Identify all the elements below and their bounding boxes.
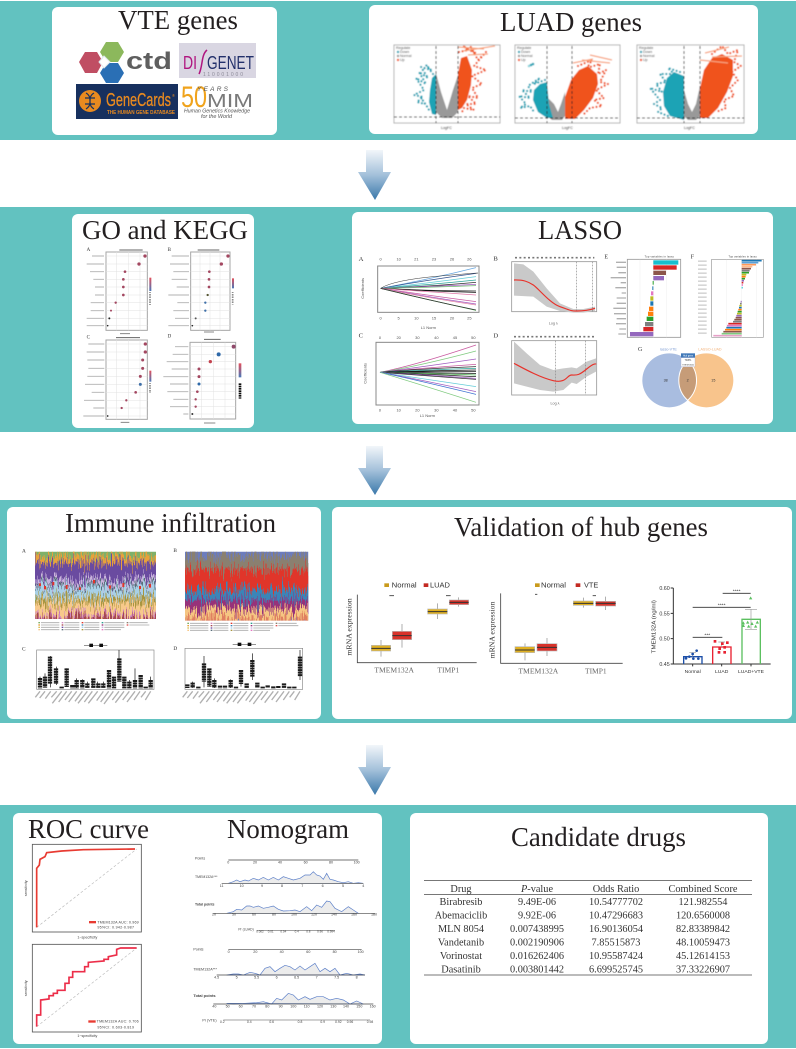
chart: volcano plot 1: Normal	[400, 54, 412, 58]
chart: enrichment dot plots A-D: C	[87, 335, 91, 340]
chart: volcano plot 3: Regulate	[639, 46, 653, 50]
table: drug candidates: 16.90136054	[589, 924, 643, 935]
chart: box plots C: C	[22, 647, 26, 653]
table: drug candidates: Birabresib	[440, 897, 482, 908]
chart: nomogram LUAD: TMEM132A***	[195, 875, 218, 879]
chart: nomogram LUAD: 0.04	[280, 929, 287, 933]
legend B	[187, 623, 298, 631]
chart: Venn diagram G: G	[638, 347, 643, 353]
chart: nomogram VTE: 160	[370, 1004, 376, 1008]
chart: nomogram LUAD: Points	[195, 856, 205, 860]
chart: ROC curve LUAD: TMEM132A AUC: 0.969	[97, 920, 139, 924]
chart: volcano plot 1: Regulate	[396, 46, 410, 50]
chart: nomogram LUAD: Pr (LUAD)	[238, 928, 254, 932]
chart: LASSO coefficients C: 0	[379, 335, 382, 340]
chart: nomogram LUAD: 9	[261, 884, 263, 888]
arrow: step 1 to step 2	[358, 150, 391, 200]
chart: bar chart TMEM132A ng/ml: ****	[733, 588, 741, 594]
table: drug candidates: 0.002190906	[510, 938, 564, 948]
chart: nomogram LUAD: 0.4	[295, 929, 299, 933]
chart: LASSO coefficients C: 10	[396, 408, 402, 413]
logo: OMIM 50 years: Human Genetics Knowledge	[184, 108, 250, 114]
table: drug candidates: 10.95587424	[589, 951, 643, 962]
chart: nomogram VTE: 80	[333, 950, 337, 954]
chart: nomogram VTE: 0.2	[220, 1020, 225, 1024]
chart: nomogram VTE: 8	[356, 975, 358, 979]
chart: Venn diagram G: LASSO-LUAD	[698, 347, 722, 351]
logo: OMIM 50 years: MIM	[207, 91, 253, 111]
chart: bar chart TMEM132A ng/ml: ***	[704, 632, 710, 638]
chart: LASSO coefficients C: 0	[379, 408, 382, 413]
chart: nomogram VTE: 60	[239, 1004, 243, 1008]
panel: LASSO	[352, 212, 773, 424]
chart: nomogram LUAD: 100	[354, 861, 360, 865]
chart: nomogram LUAD: 0.96	[317, 929, 323, 933]
chart: nomogram VTE: 130	[330, 1004, 336, 1008]
chart: ROC curve LUAD: sensitivity	[24, 880, 28, 896]
chart: box plot LUAD: mRNA expression	[344, 598, 353, 656]
panel: Validation of hub genes	[332, 507, 792, 719]
chart: nomogram LUAD: 20	[253, 861, 257, 865]
heading: LASSO: LASSO	[538, 215, 622, 245]
panel: Immune infiltration	[7, 507, 321, 719]
chart: box plot VTE: mRNA expression	[488, 601, 497, 658]
chart: Venn diagram G: 2	[687, 379, 689, 383]
chart: enrichment dot plots A-D: B	[168, 248, 172, 253]
table: drug candidates	[424, 880, 752, 976]
chart: LASSO coefficients C: 50	[471, 335, 476, 340]
chart: volcano plot 3: Up	[643, 58, 648, 62]
chart: enrichment dot plots A-D: D	[168, 334, 172, 339]
chart: LASSO coefficients C: 40	[453, 408, 458, 413]
chart: box plot LUAD	[344, 581, 477, 675]
chart: ROC curve LUAD: 1−specificity	[77, 935, 98, 939]
heading: Candidate drugs: Candidate drugs	[511, 822, 686, 852]
chart: nomogram VTE: 20	[253, 950, 257, 954]
chart: LASSO coefficients A: 5	[398, 316, 401, 321]
table: drug candidates: 48.10059473	[676, 938, 730, 948]
panel: GO and KEGG	[72, 214, 254, 428]
chart: nomogram LUAD: 80	[272, 913, 276, 917]
chart: box plot LUAD: LUAD	[430, 581, 450, 590]
chart: cross validation B	[493, 256, 597, 325]
chart: bar chart TMEM132A ng/ml: LUAD+VTE	[738, 669, 765, 675]
band: immune and validation	[0, 500, 796, 723]
chart: LASSO coefficients A: 20	[450, 316, 455, 321]
panel: VTE genes	[52, 5, 277, 135]
table: drug candidates: 10.47296683	[589, 910, 643, 922]
table: drug candidates: 9.92E-06	[518, 910, 556, 922]
chart: box plot VTE: Normal	[541, 581, 566, 590]
chart: Venn diagram G	[638, 347, 733, 407]
chart: LASSO coefficients C: 30	[434, 408, 439, 413]
chart: ROC curve VTE: sensitivity	[24, 980, 28, 996]
chart: stacked bars A: A	[22, 549, 26, 555]
chart: nomogram VTE: 90	[279, 1004, 283, 1008]
chart: LASSO coefficients C: 40	[434, 335, 439, 340]
chart: top variables E	[604, 254, 681, 337]
chart: stacked bars B: B	[173, 548, 177, 554]
chart: nomogram LUAD: 60	[304, 861, 308, 865]
chart: volcano plot 3: Down	[643, 50, 652, 54]
table: drug candidates: 0.003801442	[510, 964, 564, 976]
chart: nomogram LUAD	[195, 856, 377, 933]
chart: nomogram VTE: 140	[343, 1004, 349, 1008]
chart: nomogram LUAD: 80	[329, 861, 333, 865]
chart: nomogram VTE: 0.4	[247, 1020, 252, 1024]
chart: nomogram VTE: 0.9	[320, 1020, 325, 1024]
chart: box plot VTE: TMEM132A	[518, 666, 559, 675]
panel: ROC curve and Nomogram	[13, 813, 382, 1044]
chart: nomogram VTE: 7	[316, 975, 318, 979]
chart: top variables F: Top variables in lasso	[728, 255, 757, 259]
chart: ROC curve VTE	[24, 944, 141, 1038]
chart: nomogram VTE: 150	[356, 1004, 362, 1008]
chart: LASSO coefficients A: 0	[380, 256, 383, 261]
table: drug candidates: Vandetanib	[438, 938, 484, 948]
table: drug candidates: 120.6560008	[676, 910, 730, 922]
chart: nomogram VTE: 60	[306, 950, 310, 954]
chart: nomogram LUAD: 10	[240, 884, 244, 888]
heading: Nomogram: Nomogram	[227, 814, 349, 844]
chart: volcano plot 3: Normal	[643, 54, 655, 58]
chart: bar chart TMEM132A ng/ml: LUAD	[715, 669, 729, 675]
chart: bar chart TMEM132A ng/ml	[651, 586, 771, 675]
chart: nomogram VTE: 100	[290, 1004, 296, 1008]
chart: nomogram VTE: 80	[265, 1004, 269, 1008]
table: drug candidates: 7.85515873	[592, 938, 640, 948]
chart: volcano plot 3: LogFC	[684, 126, 695, 130]
chart: enrichment dot plots A-D	[83, 248, 241, 423]
chart: nomogram LUAD: 0.8	[306, 929, 311, 933]
chart: bar chart TMEM132A ng/ml: TMEM132A (ng/ml)	[651, 600, 657, 653]
chart: volcano plot 2: Down	[521, 50, 530, 54]
table: drug candidates: Vorinostat	[440, 951, 482, 962]
band: data sources	[0, 1, 796, 140]
chart: bar chart TMEM132A ng/ml: 0.60	[659, 586, 670, 592]
chart: top variables F: F	[691, 254, 695, 260]
chart: nomogram VTE: 0.92	[335, 1020, 342, 1024]
chart: box plots D	[173, 643, 303, 704]
panel: LUAD genes	[369, 5, 758, 134]
chart: LASSO coefficients C: C	[359, 333, 364, 340]
table: drug candidates: MLN 8054	[438, 924, 484, 935]
chart: top variables F	[691, 254, 763, 337]
chart: LASSO coefficients A	[359, 256, 479, 330]
table: drug candidates: P-value	[520, 884, 553, 895]
chart: nomogram LUAD: 6	[322, 884, 324, 888]
chart: box plots C	[22, 644, 154, 704]
chart: LASSO coefficients C	[359, 333, 479, 418]
chart: nomogram VTE: 5.5	[254, 975, 259, 979]
chart: nomogram VTE: Pr (VTE)	[202, 1018, 217, 1022]
chart: nomogram LUAD: 180	[371, 913, 377, 917]
chart: volcano plot 2: Normal	[521, 54, 533, 58]
band: diagnostics and drugs	[0, 805, 796, 1048]
chart: nomogram VTE: 4.5	[214, 975, 219, 979]
table: drug candidates: 9.49E-06	[518, 897, 556, 908]
chart: nomogram LUAD: 11	[220, 884, 224, 888]
chart: ROC curve VTE: TMEM132A AUC: 0.706	[97, 1020, 139, 1024]
chart: nomogram LUAD: 50	[232, 913, 236, 917]
chart: LASSO coefficients A: 15	[432, 316, 437, 321]
chart: LASSO coefficients C: 30	[415, 335, 420, 340]
chart: Venn diagram G: 38	[664, 379, 668, 383]
arrow: step 2 to step 3	[358, 446, 391, 495]
chart: LASSO coefficients A: 21	[414, 256, 419, 261]
logo: DisGeNET: 110001000	[203, 72, 243, 78]
chart: LASSO coefficients A: A	[359, 256, 364, 263]
chart: nomogram LUAD: 140	[331, 913, 337, 917]
chart: LASSO coefficients A: 25	[467, 316, 472, 321]
chart: box plot LUAD: TMEM132A	[374, 666, 414, 675]
logo: ctd	[79, 42, 172, 83]
logo: DisGeNET	[179, 43, 256, 78]
chart: volcano plot 1: Up	[400, 58, 405, 62]
chart: Venn diagram G: TIMP1	[685, 360, 692, 362]
chart: LASSO coefficients A: 26	[450, 256, 455, 261]
chart: LASSO coefficients A: 10	[396, 256, 402, 261]
table: drug candidates: 37.33226907	[676, 964, 730, 976]
chart: Venn diagram G: lasso-VTE	[660, 347, 677, 351]
chart: volcano plot 2	[515, 45, 620, 130]
chart: nomogram LUAD: 40	[278, 861, 282, 865]
chart: nomogram LUAD: 20	[212, 913, 216, 917]
chart: cross validation D: D	[493, 333, 498, 340]
chart: cross validation B: B	[493, 256, 498, 263]
chart: ROC curve VTE: 1−specificity	[77, 1034, 98, 1038]
logo: OMIM 50 years: YEARS	[197, 86, 229, 93]
chart: volcano plot 1: Down	[400, 50, 409, 54]
chart: nomogram VTE: TMEM132A***	[193, 967, 217, 971]
chart: cross validation D: Log λ	[551, 401, 560, 405]
table: drug candidates: Abemaciclib	[435, 910, 487, 922]
chart: volcano plot 1	[394, 45, 500, 130]
chart: nomogram VTE: 6	[276, 975, 278, 979]
chart: nomogram VTE: 0.96	[347, 1020, 353, 1024]
chart: LASSO coefficients C: Coefficients	[363, 363, 368, 384]
chart: box plots D: D	[173, 646, 177, 652]
chart: cross validation D	[493, 333, 597, 405]
chart: Venn diagram G: Hub gene	[683, 355, 694, 357]
table: drug candidates: 82.83389842	[676, 924, 730, 935]
logo: DisGeNET: GENET	[207, 53, 254, 73]
chart: nomogram VTE: 7.5	[334, 975, 339, 979]
table: drug candidates: 0.016262406	[510, 951, 564, 962]
chart: volcano plot 2: Regulate	[517, 46, 531, 50]
chart: nomogram VTE: 0.6	[269, 1020, 274, 1024]
heading: ROC curve: ROC curve	[28, 814, 149, 844]
chart: nomogram LUAD: 8	[281, 884, 283, 888]
legend A	[38, 622, 149, 630]
chart: box plot LUAD: Normal	[392, 581, 417, 590]
chart: stacked bars A	[22, 549, 167, 631]
heading: Immune infiltration: Immune infiltration	[65, 508, 276, 538]
chart: LASSO coefficients A: 10	[414, 316, 419, 321]
chart: top variables E: Top variables in lasso	[645, 255, 675, 259]
chart: nomogram LUAD: 7	[301, 884, 303, 888]
table: drug candidates: Odds Ratio	[593, 884, 639, 895]
heading: LUAD genes: LUAD genes	[500, 7, 642, 37]
chart: LASSO coefficients C: 20	[396, 335, 402, 340]
chart: nomogram VTE: 110	[304, 1004, 310, 1008]
heading: VTE genes: VTE genes	[118, 5, 238, 35]
chart: nomogram VTE: 100	[358, 950, 364, 954]
table: drug candidates: 45.12614153	[676, 951, 730, 962]
logo: OMIM 50 years: for the World	[201, 114, 233, 120]
heading: Validation of hub genes: Validation of hub genes	[454, 512, 708, 542]
logo: GeneCards	[76, 84, 178, 119]
chart: nomogram LUAD: 120	[311, 913, 317, 917]
chart: nomogram LUAD: 160	[351, 913, 357, 917]
table: drug candidates: 10.54777702	[589, 897, 643, 908]
chart: LASSO coefficients A: 26	[467, 256, 472, 261]
table: drug candidates: 0.007438995	[510, 924, 564, 935]
heading: GO and KEGG: GO and KEGG	[82, 215, 248, 245]
table: drug candidates: Combined Score	[669, 884, 738, 895]
chart: nomogram VTE: 5	[236, 975, 238, 979]
chart: nomogram LUAD: 0.002	[256, 929, 264, 933]
chart: nomogram LUAD: 100	[291, 913, 297, 917]
arrow: step 3 to step 4	[358, 745, 391, 795]
chart: LASSO coefficients A: Coefficients	[360, 278, 365, 299]
chart: nomogram VTE: 120	[317, 1004, 323, 1008]
chart: volcano plot 1: LogFC	[441, 126, 452, 130]
chart: Venn diagram G: 15	[711, 379, 715, 383]
chart: bar chart TMEM132A ng/ml: 0.45	[659, 662, 670, 668]
chart: nomogram VTE: Total points	[193, 993, 216, 998]
chart: nomogram VTE: 6.5	[294, 975, 299, 979]
chart: bar chart TMEM132A ng/ml: ****	[718, 602, 726, 608]
chart: nomogram VTE: 40	[280, 950, 284, 954]
logo: DisGeNET: DI	[183, 53, 197, 73]
table: drug candidates: 121.982554	[679, 897, 727, 908]
chart: volcano plot 3	[637, 45, 744, 130]
chart: nomogram LUAD: 60	[252, 913, 256, 917]
chart: nomogram LUAD: 0	[227, 861, 229, 865]
chart: LASSO coefficients A: 23	[432, 256, 437, 261]
chart: nomogram LUAD: 0.994	[327, 929, 335, 933]
chart: nomogram LUAD: 5	[342, 884, 344, 888]
logo: OMIM 50 years: 50	[181, 81, 207, 114]
chart: nomogram VTE: 50	[226, 1004, 230, 1008]
chart: Venn diagram G: TMEM132A	[682, 363, 694, 366]
chart: volcano plot 2: Up	[521, 58, 526, 62]
chart: nomogram VTE: 0.8	[298, 1020, 302, 1024]
chart: box plot LUAD: TIMP1	[437, 666, 459, 675]
chart: LASSO coefficients C: L1 Norm	[420, 413, 436, 418]
logo: OMIM 50 years	[181, 81, 253, 120]
chart: ROC curve VTE: 95%CI: 0.603-0.819	[97, 1025, 134, 1029]
chart: LASSO coefficients A: 0	[380, 316, 383, 321]
chart: nomogram VTE: 0.98	[367, 1020, 373, 1024]
chart: nomogram VTE: Points	[193, 947, 204, 951]
chart: LASSO coefficients C: 50	[471, 408, 476, 413]
chart: top variables E: E	[604, 254, 608, 260]
logo: GeneCards: GeneCards	[106, 90, 171, 110]
chart: LASSO coefficients C: 45	[453, 335, 458, 340]
chart: box plot VTE: VTE	[584, 581, 598, 590]
panel: Candidate drugs	[410, 813, 768, 1044]
table: drug candidates: Dasatinib	[441, 964, 481, 976]
table: drug candidates: Drug	[450, 884, 472, 895]
logo: GeneCards: ®	[172, 93, 175, 98]
chart: LASSO coefficients C: 20	[415, 408, 420, 413]
chart: ROC curve LUAD: 95%CI: 0.942-0.987	[97, 925, 134, 929]
chart: nomogram LUAD: 0.01	[268, 929, 274, 933]
chart: nomogram VTE: 40	[212, 1004, 216, 1008]
chart: bar chart TMEM132A ng/ml: 0.55	[659, 611, 670, 617]
table: drug candidates: 6.699525745	[589, 964, 643, 976]
logo: GeneCards: THE HUMAN GENE DATABASE	[107, 110, 175, 116]
chart: nomogram VTE	[193, 947, 376, 1024]
chart: nomogram LUAD: 4	[362, 884, 364, 888]
chart: nomogram LUAD: Total points	[195, 903, 215, 907]
chart: bar chart TMEM132A ng/ml: Normal	[685, 669, 701, 675]
chart: ROC curve LUAD	[24, 844, 141, 939]
logo: ctd: ctd	[126, 48, 172, 75]
chart: volcano plot 2: LogFC	[562, 126, 573, 130]
chart: stacked bars B	[173, 548, 317, 629]
chart: cross validation B: Log λ	[549, 321, 558, 325]
chart: box plot VTE	[488, 581, 623, 675]
band: enrichment and feature selection	[0, 207, 796, 432]
chart: enrichment dot plots A-D: A	[87, 248, 91, 253]
chart: LASSO coefficients A: L1 Norm	[421, 325, 437, 330]
chart: bar chart TMEM132A ng/ml: 0.50	[659, 637, 670, 643]
chart: box plot VTE: TIMP1	[585, 666, 607, 675]
chart: nomogram VTE: 70	[252, 1004, 256, 1008]
chart: nomogram VTE: 0	[228, 950, 230, 954]
